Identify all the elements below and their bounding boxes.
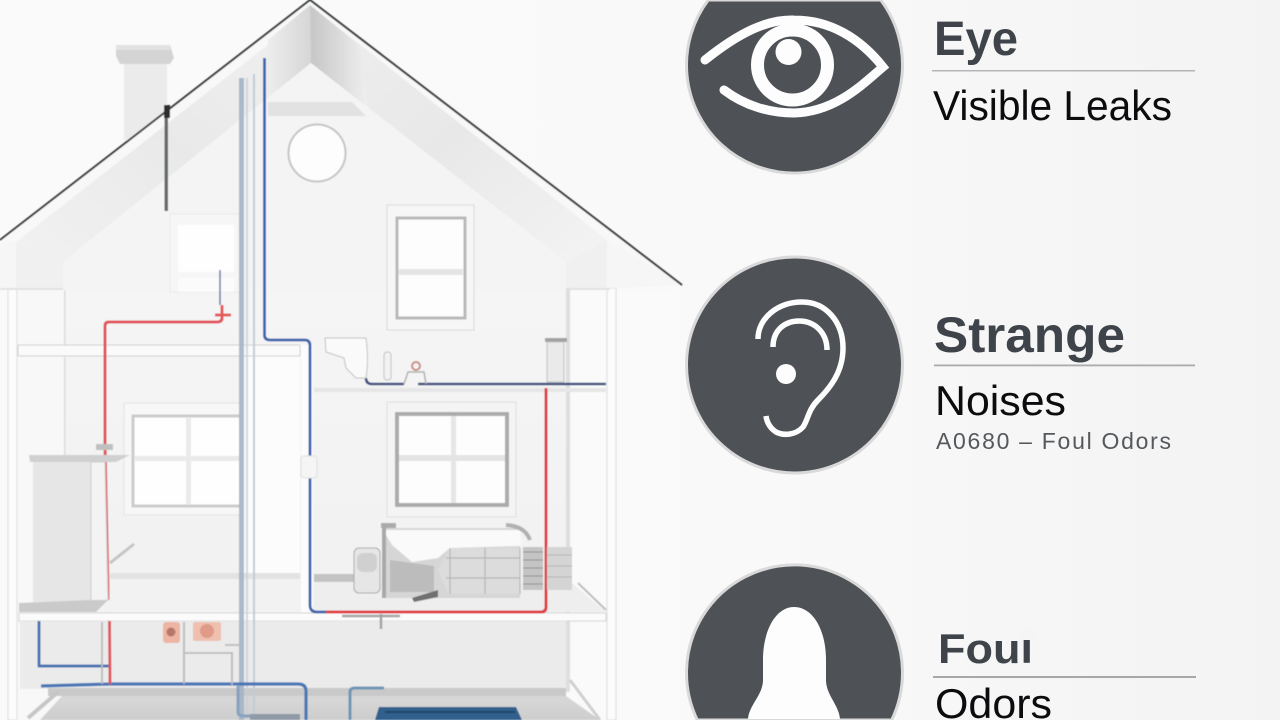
basement pump — [250, 714, 300, 720]
left room white wall — [240, 356, 300, 576]
ground floor room floor — [110, 573, 606, 613]
item: nose / foul odors — [686, 565, 1196, 720]
basement grey pipe frame — [102, 622, 240, 685]
basement floor — [28, 680, 600, 720]
heading: Eye: Eye — [934, 13, 1018, 66]
house walls — [0, 250, 680, 720]
item: ear / strange noises — [686, 257, 1195, 473]
divider — [932, 70, 1195, 72]
radiator and steps — [523, 547, 572, 590]
red valve — [215, 305, 231, 316]
upper left window — [170, 214, 240, 292]
icon: nose — [686, 565, 902, 720]
red hot water pipes — [105, 305, 546, 684]
icon: ear — [686, 257, 902, 473]
label: Visible Leaks: Visible Leaks — [933, 82, 1172, 129]
lower right window — [387, 402, 516, 517]
chimney — [116, 45, 174, 140]
attic round window — [288, 124, 346, 182]
item: eye / visible leaks — [686, 0, 1195, 173]
icon: eye — [686, 0, 902, 173]
under floor valve — [342, 614, 400, 629]
vertical drain stacks — [242, 74, 254, 720]
caption: A0680 – Foul Odors: A0680 – Foul Odors — [936, 428, 1171, 454]
heading: Strange: Strange — [934, 307, 1125, 363]
roof and attic — [0, 0, 682, 290]
central partition wall — [301, 345, 313, 613]
small appliance — [354, 548, 380, 593]
upper right window — [387, 205, 474, 330]
upper floor slab — [18, 345, 606, 392]
label: Noises: Noises — [935, 377, 1066, 424]
basement radiator — [375, 707, 522, 720]
heading: Foul: Foul — [938, 625, 1033, 672]
divider — [934, 364, 1195, 366]
water heater cabinet — [19, 444, 134, 612]
house cutaway illustration — [0, 0, 682, 720]
lower left window — [124, 403, 241, 515]
divider — [933, 676, 1196, 678]
sofa — [381, 523, 530, 602]
blue cold water pipes — [39, 58, 606, 720]
red boiler controls — [163, 622, 221, 643]
ground floor slab — [19, 613, 606, 621]
upper floor fixtures — [325, 338, 567, 384]
basement walls — [20, 621, 566, 689]
chimney flashing bracket — [164, 105, 170, 211]
wall box on partition — [301, 456, 317, 478]
